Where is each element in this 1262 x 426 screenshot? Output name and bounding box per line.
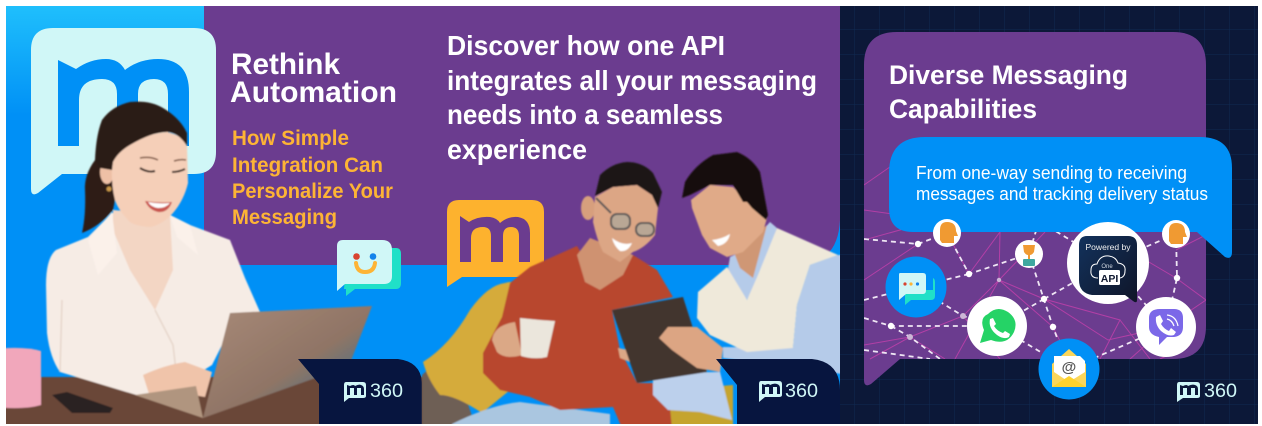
man two neck — [735, 225, 767, 278]
ear and earring — [98, 167, 113, 186]
shirt — [46, 213, 260, 397]
callout text — [916, 163, 1208, 204]
man two shirt sleeve — [723, 255, 850, 375]
heading: rethink automation: Rethink — [231, 48, 340, 81]
man one sweater — [483, 246, 673, 426]
callout text: From one-way sending to receiving — [916, 163, 1187, 183]
man two face — [691, 185, 767, 257]
heading: discover how one api: experience — [447, 134, 587, 165]
icon: head node right — [1162, 220, 1190, 248]
man two hand — [659, 327, 723, 372]
heading: discover how one api — [447, 30, 817, 165]
icon: powered by one api badge: One — [1101, 264, 1113, 270]
man two smile — [712, 234, 730, 246]
subheading: how simple integration can personalize your messaging: How Simple — [232, 127, 349, 150]
neck and chest — [113, 210, 173, 310]
badge: m360 logo panel three — [1177, 381, 1237, 402]
icon: email envelope: @ — [1062, 359, 1076, 376]
subheading: how simple integration can personalize your messaging: Personalize Your — [232, 180, 393, 203]
table — [0, 377, 430, 426]
man one glasses — [596, 198, 654, 236]
subheading: how simple integration can personalize your messaging: Integration Can — [232, 154, 383, 177]
heading: rethink automation — [230, 48, 397, 109]
icon: email envelope — [1038, 338, 1100, 400]
collar right — [171, 216, 190, 226]
badge: m360 logo panel two — [716, 359, 840, 424]
heading: rethink automation: Automation — [230, 76, 397, 109]
panel: rethink automation background — [6, 6, 840, 424]
icon: viber — [1136, 297, 1196, 357]
icon: orange m speech bubble — [447, 200, 544, 287]
icon: powered by one api badge — [1067, 222, 1149, 304]
icon: trophy node — [1015, 240, 1043, 268]
panel: diverse messaging background — [840, 6, 1258, 424]
icon: powered by one api badge: Powered by — [1086, 242, 1131, 252]
panel: purple speech bubble — [864, 32, 1206, 385]
man two ear — [750, 189, 764, 213]
heading: diverse messaging capabilities: Capabilities — [889, 94, 1037, 124]
icon: chat bubbles — [886, 256, 946, 318]
laptop — [203, 306, 372, 418]
subheading: how simple integration can personalize your messaging — [232, 127, 393, 229]
callout: blue message bubble — [889, 137, 1232, 258]
man two vest — [697, 228, 838, 352]
heading: diverse messaging capabilities: Diverse Messaging — [889, 60, 1128, 90]
man one smile — [612, 238, 632, 251]
mug — [0, 348, 41, 408]
heading: discover how one api: needs into a seamless — [447, 99, 723, 130]
icon: large m speech bubble — [31, 28, 216, 194]
icon: powered by one api badge: API — [1101, 273, 1118, 285]
icon: smiley chat bubble — [337, 240, 401, 296]
man two lower sleeve — [653, 372, 732, 420]
collar left — [105, 211, 115, 233]
photo: woman with laptop — [0, 102, 430, 426]
man one face — [593, 185, 658, 262]
heading: diverse messaging capabilities — [889, 60, 1128, 124]
man one neck — [577, 238, 633, 290]
icon: whatsapp — [967, 296, 1027, 356]
heading: discover how one api: Discover how one API — [447, 30, 725, 61]
hair top — [95, 102, 187, 170]
photo: two men with tablet — [422, 152, 850, 426]
callout text: messages and tracking delivery status — [916, 184, 1208, 204]
man two collar — [727, 222, 777, 300]
badge: m360 logo panel three: 360 — [1204, 381, 1237, 402]
hand — [143, 362, 212, 397]
man one far hand — [618, 348, 630, 362]
man two hair — [682, 152, 768, 220]
badge: m360 logo panel two: 360 — [785, 381, 818, 402]
yellow pillow — [422, 281, 512, 413]
man one hair — [595, 162, 662, 208]
icon: head node left — [933, 219, 961, 247]
sofa — [421, 370, 472, 424]
face — [112, 132, 188, 227]
man one hand — [492, 322, 522, 357]
phone — [52, 392, 113, 413]
heading: discover how one api: integrates all your messaging — [447, 65, 817, 96]
eyes and brows — [140, 168, 185, 172]
man one ear — [581, 196, 595, 220]
smile — [145, 201, 172, 212]
badge: m360 logo panel one: 360 — [370, 381, 403, 402]
ponytail hair — [82, 150, 125, 233]
badge: m360 logo panel one — [298, 359, 422, 424]
tablet — [612, 297, 707, 383]
network lines — [864, 160, 1206, 369]
network dots — [888, 218, 1180, 340]
cup — [520, 318, 555, 358]
jeans — [452, 402, 610, 426]
subheading: how simple integration can personalize your messaging: Messaging — [232, 206, 337, 229]
